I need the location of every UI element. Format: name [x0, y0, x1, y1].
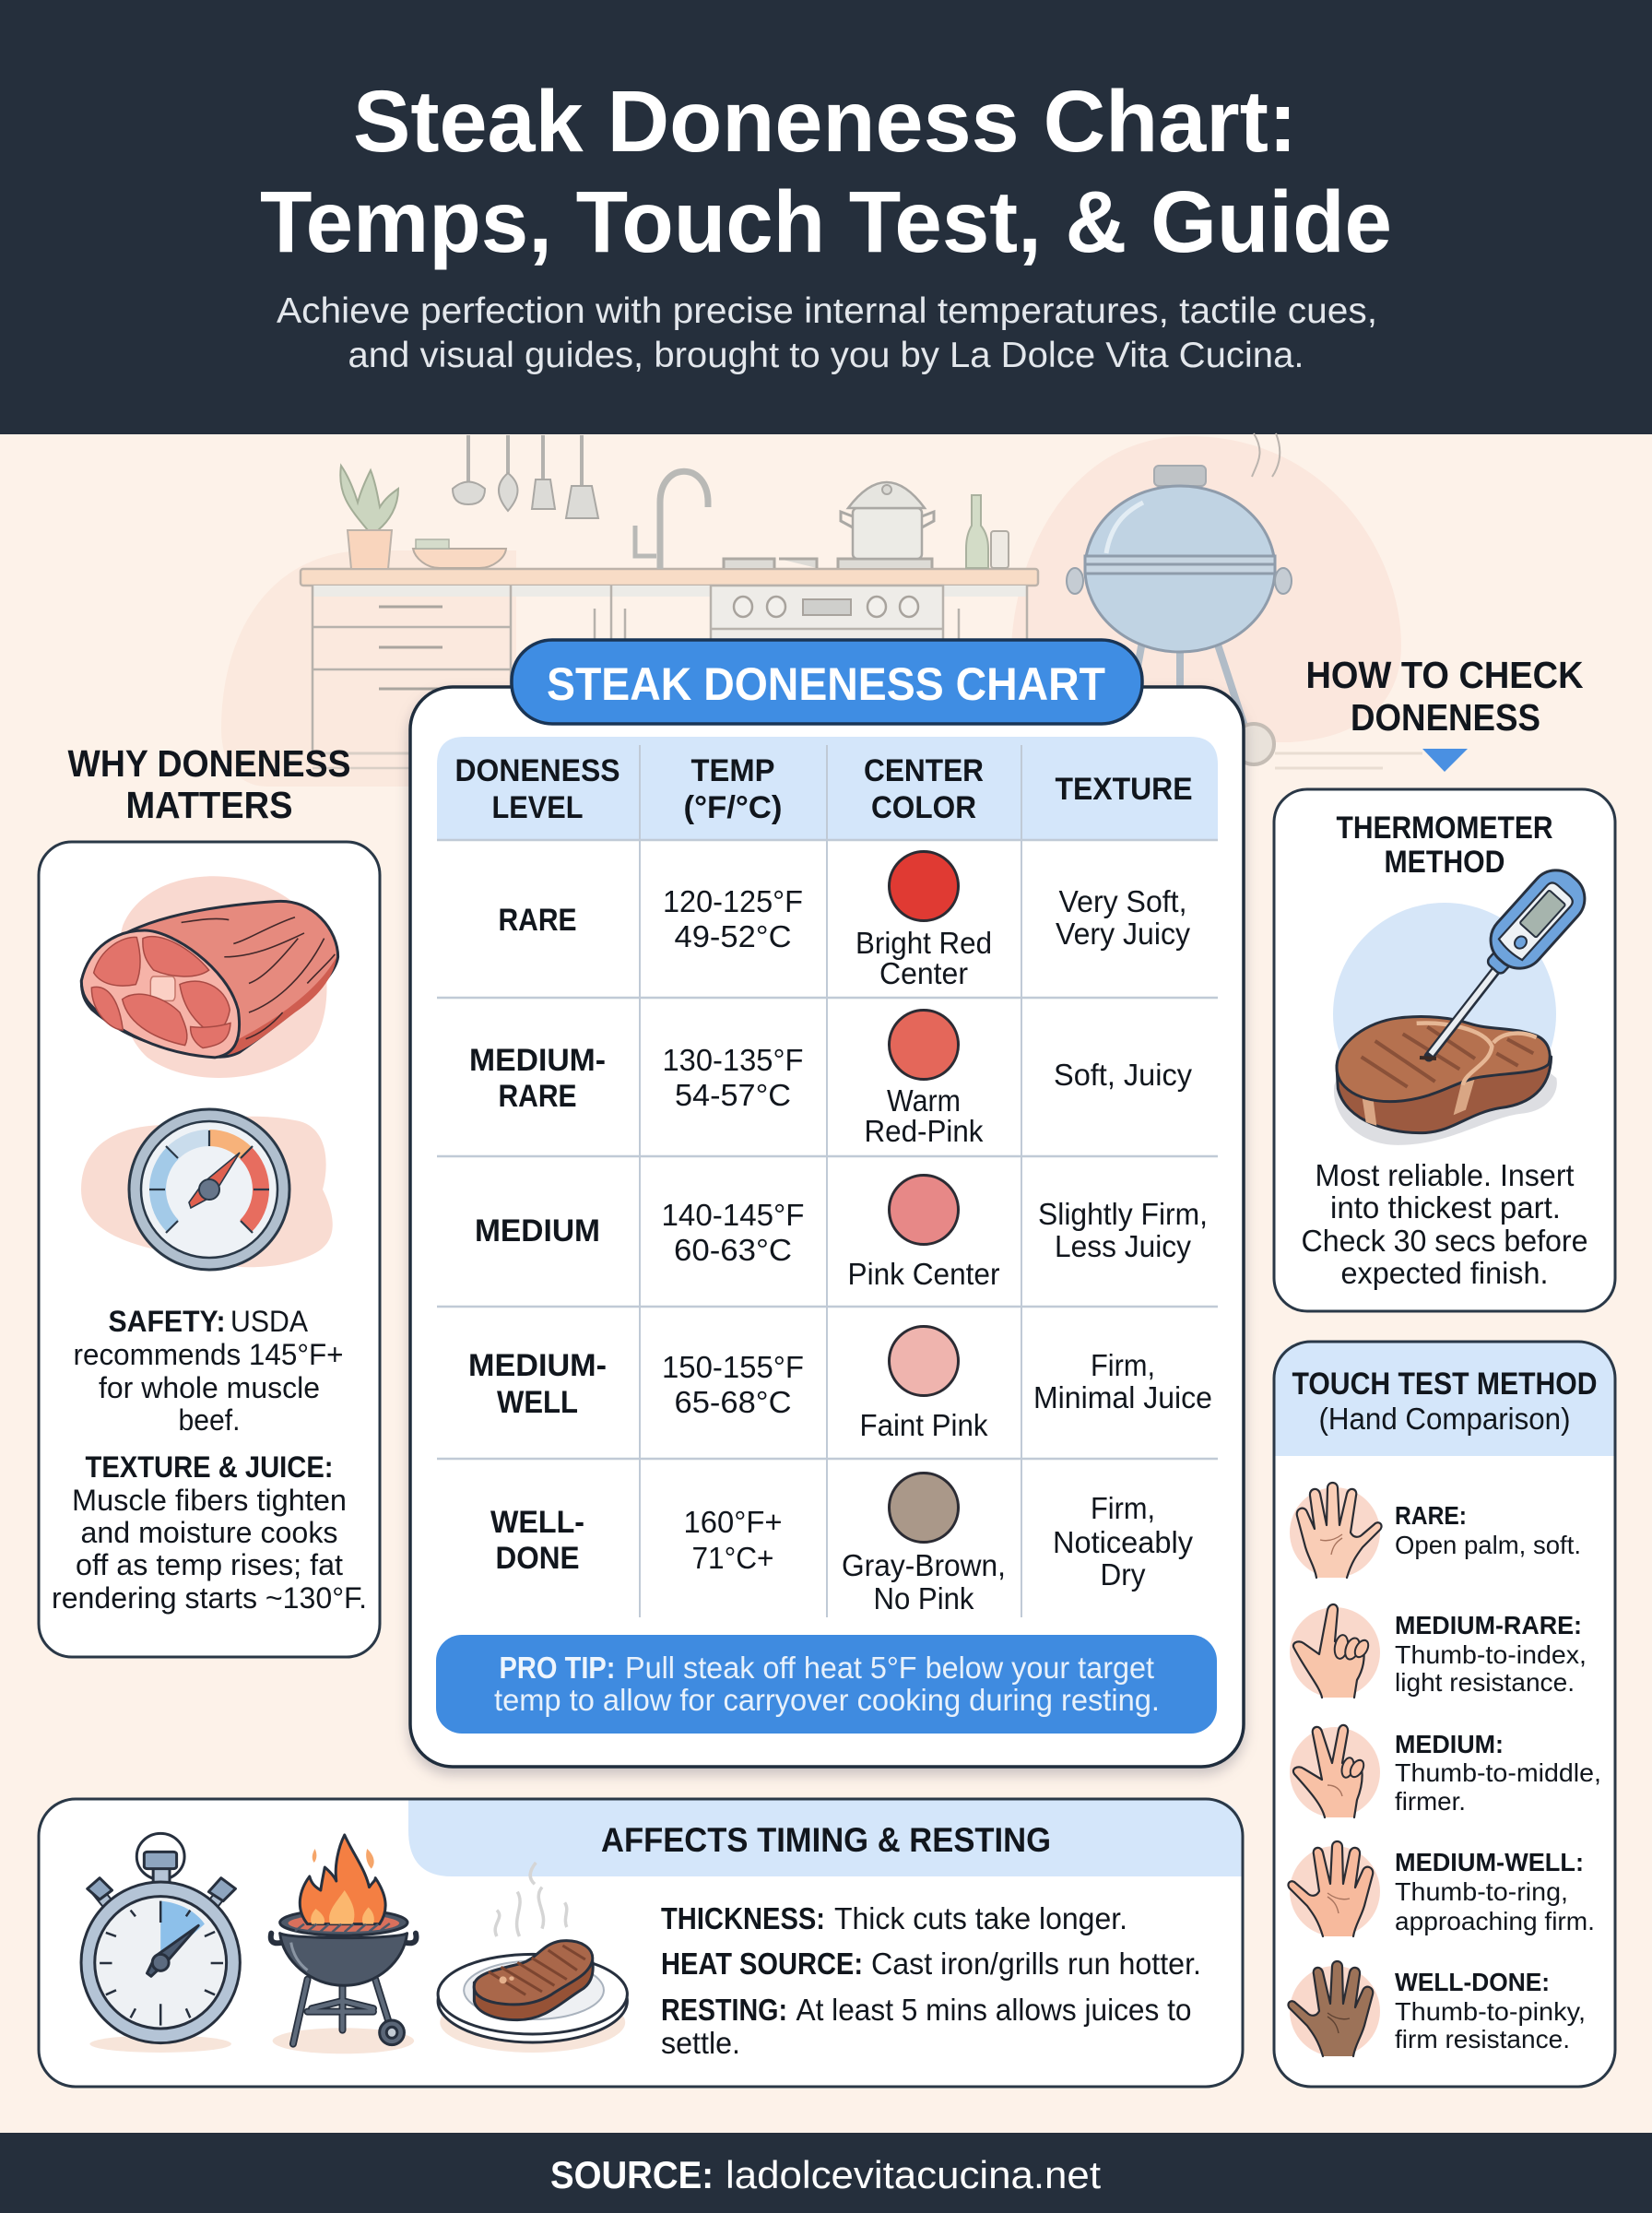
subtitle: and visual guides, brought to you by La Dolce Vita Cucina. [348, 336, 1304, 375]
hand row: medium-rare [1290, 1604, 1587, 1698]
table header labels: LEVEL [492, 790, 583, 825]
row: medium [475, 1175, 1208, 1291]
panel: steak doneness chart [410, 640, 1244, 1767]
row: medium: MEDIUM [475, 1213, 600, 1249]
text: texture and juice [52, 1450, 367, 1615]
row: medium-well: 65-68°C [675, 1385, 791, 1419]
row: rare: RARE [498, 903, 577, 938]
row: medium-well: Firm, [1091, 1348, 1155, 1382]
row: rare: Bright Red [856, 926, 992, 960]
row: rare: Very Soft, [1058, 884, 1187, 918]
hand row: medium [1290, 1725, 1601, 1817]
text: texture and juice: TEXTURE & JUICE: [85, 1450, 334, 1484]
hand row: medium: firmer. [1395, 1787, 1466, 1816]
row: medium: 60-63°C [674, 1233, 792, 1267]
hand row: well-done: firm resistance. [1395, 2025, 1570, 2053]
hand row: medium-rare: MEDIUM-RARE: [1395, 1611, 1582, 1639]
chart title badge [512, 640, 1142, 724]
heading: touch test method: TOUCH TEST METHOD [1292, 1367, 1597, 1402]
row: medium-well: Faint Pink [859, 1408, 988, 1442]
left heading: why doneness matters: WHY DONENESS [68, 742, 350, 785]
row: rare: Center [879, 956, 968, 990]
text: texture and juice: and moisture cooks [81, 1516, 337, 1549]
row: well-done: WELL- [490, 1505, 584, 1540]
title: Steak Doneness Chart: [353, 73, 1297, 171]
row: medium-well: Minimal Juice [1033, 1380, 1212, 1414]
text: thermometer instructions: Most reliable. Insert [1315, 1158, 1575, 1192]
text: safety: for whole muscle [99, 1371, 320, 1404]
text: texture and juice: rendering starts ~130°F. [52, 1581, 367, 1615]
subtitle [277, 291, 1377, 375]
row: well-done: 160°F+ [684, 1505, 782, 1539]
row: well-done: Firm, [1091, 1491, 1155, 1525]
header band [0, 0, 1652, 434]
hand row: medium-well: Thumb-to-ring, [1395, 1877, 1568, 1906]
text: timing factors: settle. [661, 2026, 740, 2060]
row: medium-rare: Soft, Juicy [1054, 1058, 1192, 1092]
row: medium-rare: RARE [498, 1079, 577, 1114]
row: medium-well: MEDIUM- [468, 1348, 607, 1383]
table header labels: (°F/°C) [684, 790, 782, 825]
row: medium-rare: 54-57°C [675, 1078, 791, 1112]
row: medium-rare [469, 1011, 1192, 1148]
text: texture and juice: off as temp rises; fat [76, 1548, 343, 1581]
heading: touch test method [1292, 1367, 1597, 1436]
arrow: pointing down [1422, 749, 1468, 772]
hand row: well-done: WELL-DONE: [1395, 1968, 1550, 1996]
callout: pro tip: temp to allow for carryover cooking during resting. [494, 1683, 1160, 1717]
row: well-done: 71°C+ [691, 1541, 774, 1575]
row: medium-well: 150-155°F [662, 1350, 804, 1384]
icon: beef roast [81, 876, 338, 1078]
footer: source: SOURCE: [550, 2153, 714, 2196]
chart title badge: STEAK DONENESS CHART [547, 658, 1105, 710]
text: safety: SAFETY: [109, 1305, 225, 1338]
table header labels: TEXTURE [1055, 772, 1193, 807]
icon: thermometer in steak [1333, 859, 1595, 1145]
header band [408, 1799, 1243, 1876]
row: well-done: DONE [496, 1541, 579, 1576]
table header labels: CENTER [864, 753, 984, 788]
row: medium-rare: Warm [887, 1083, 961, 1118]
background kitchen illustration [221, 433, 1422, 787]
left heading: why doneness matters [68, 742, 350, 826]
row: rare [498, 852, 1190, 990]
title [260, 73, 1392, 271]
text: timing factors: At least 5 mins allows juices to [796, 1993, 1191, 2027]
icon: stopwatch [81, 1833, 240, 2053]
footer: source [0, 2133, 1652, 2213]
hand row: medium-well: MEDIUM-WELL: [1395, 1848, 1584, 1876]
row: medium: Less Juicy [1055, 1229, 1191, 1263]
grid lines [640, 745, 1021, 1617]
text: thermometer instructions [1302, 1158, 1587, 1290]
row: medium: Pink Center [848, 1257, 1000, 1291]
panel: thermometer method [1274, 789, 1615, 1311]
row: medium-well: WELL [497, 1385, 578, 1420]
text: thermometer instructions: into thickest part. [1330, 1190, 1561, 1225]
text: thermometer instructions: Check 30 secs before [1302, 1224, 1587, 1258]
hand row: medium: Thumb-to-middle, [1395, 1758, 1601, 1787]
row: well-done [490, 1473, 1193, 1615]
hand row: well-done [1288, 1961, 1586, 2056]
row: medium-rare: 130-135°F [662, 1043, 804, 1077]
row: medium: 140-145°F [662, 1198, 804, 1232]
text: safety [74, 1305, 343, 1437]
text: thermometer instructions: expected finish. [1340, 1256, 1549, 1290]
text: safety: beef. [179, 1403, 240, 1437]
text: safety: recommends 145°F+ [74, 1338, 343, 1371]
icon: steak on plate [438, 1863, 627, 2053]
hand row: rare: Open palm, soft. [1395, 1531, 1581, 1559]
panel: touch test method [1274, 1342, 1615, 2087]
row: rare: 49-52°C [675, 919, 791, 953]
right heading: how to check doneness: DONENESS [1351, 696, 1540, 739]
text: safety: USDA [230, 1305, 309, 1338]
row: rare: Very Juicy [1056, 917, 1190, 951]
row: medium-rare: Red-Pink [865, 1114, 984, 1148]
row: medium: Slightly Firm, [1038, 1197, 1208, 1231]
hand row: medium-rare: light resistance. [1395, 1668, 1575, 1697]
hand row: well-done: Thumb-to-pinky, [1395, 1997, 1586, 2026]
text: timing factors [661, 1901, 1201, 2060]
footer: source: ladolcevitacucina.net [726, 2153, 1101, 2196]
callout: pro tip: Pull steak off heat 5°F below your target [625, 1651, 1154, 1685]
text: timing factors: Thick cuts take longer. [834, 1901, 1127, 1935]
row: medium-well [468, 1326, 1212, 1442]
touch test header band [1274, 1342, 1615, 1456]
title: Temps, Touch Test, & Guide [260, 173, 1392, 271]
text: texture and juice: Muscle fibers tighten [72, 1484, 347, 1517]
table header labels [455, 753, 1193, 825]
heading: touch test method: (Hand Comparison) [1318, 1402, 1571, 1436]
icon: grill with flames [271, 1835, 417, 2053]
right heading: how to check doneness [1305, 654, 1584, 739]
text: timing factors: Cast iron/grills run hotter. [871, 1947, 1201, 1981]
row: rare: 120-125°F [663, 884, 803, 918]
hand row: rare: RARE: [1395, 1501, 1467, 1530]
table header labels: COLOR [871, 790, 976, 825]
callout: pro tip: PRO TIP: [500, 1651, 616, 1685]
right heading: how to check doneness: HOW TO CHECK [1305, 654, 1584, 696]
table header labels: DONENESS [455, 753, 620, 788]
heading: thermometer method: METHOD [1385, 845, 1504, 880]
row: well-done: Noticeably [1053, 1525, 1193, 1559]
hand row: medium-well [1288, 1841, 1595, 1936]
heading: thermometer method [1337, 811, 1552, 880]
heading: thermometer method: THERMOMETER [1337, 811, 1552, 846]
row: well-done: Dry [1101, 1557, 1146, 1592]
row: well-done: Gray-Brown, [842, 1548, 1006, 1582]
text: timing factors: RESTING: [661, 1993, 787, 2027]
hand row: medium-well: approaching firm. [1395, 1907, 1595, 1935]
table header band [437, 737, 1218, 840]
row: medium-rare: MEDIUM- [469, 1043, 606, 1078]
heading: affects timing: AFFECTS TIMING & RESTING [601, 1821, 1051, 1859]
panel: why doneness matters [39, 842, 380, 1657]
panel: affects timing and resting [39, 1799, 1243, 2087]
text: timing factors: THICKNESS: [661, 1901, 825, 1935]
hand row: medium-rare: Thumb-to-index, [1395, 1640, 1587, 1669]
hand row: rare [1290, 1483, 1581, 1578]
icon: temperature gauge [81, 1109, 333, 1270]
callout: pro tip [436, 1635, 1217, 1734]
left heading: why doneness matters: MATTERS [125, 784, 293, 826]
subtitle: Achieve perfection with precise internal temperatures, tactile cues, [277, 291, 1377, 331]
hand row: medium: MEDIUM: [1395, 1730, 1504, 1758]
table header labels: TEMP [691, 753, 774, 788]
row: well-done: No Pink [874, 1581, 974, 1615]
text: timing factors: HEAT SOURCE: [661, 1947, 863, 1981]
